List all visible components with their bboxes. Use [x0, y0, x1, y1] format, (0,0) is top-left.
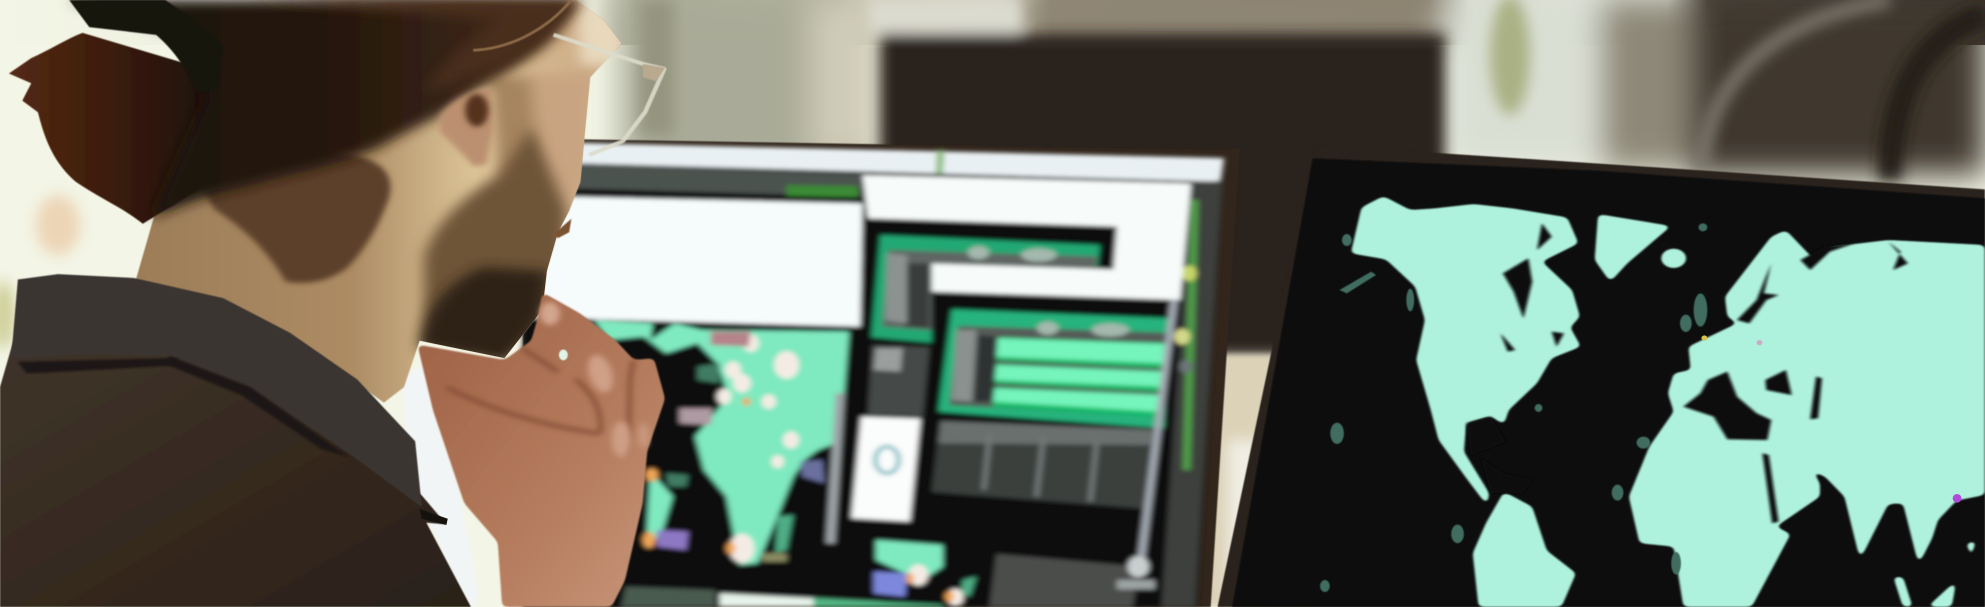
neck and face	[134, 0, 621, 403]
Southeast Asia islands	[1893, 540, 1976, 607]
Iceland	[1661, 248, 1686, 268]
neck hair wisps	[192, 152, 390, 283]
monitor frame	[523, 138, 1240, 607]
bottom white chip	[720, 593, 880, 607]
top bars	[577, 143, 1224, 182]
shirt body	[0, 333, 471, 607]
map on dashboard	[595, 320, 849, 565]
skin and beard shading clipped to face	[420, 0, 625, 364]
table panel 2	[938, 309, 1168, 428]
map markers	[1701, 335, 1707, 341]
monitor bezel	[1218, 145, 1985, 607]
glasses	[554, 35, 664, 155]
ear	[440, 87, 493, 166]
map labels	[711, 332, 751, 347]
panel rail lines	[1140, 300, 1174, 567]
left monitor with dashboard	[496, 138, 1240, 607]
table panel 1	[871, 235, 1100, 343]
world map	[1351, 196, 1985, 607]
lower grey box	[990, 554, 1139, 607]
green rows	[996, 337, 1165, 368]
lower table	[932, 420, 1154, 509]
South America	[1473, 492, 1576, 607]
Greenland	[1595, 214, 1671, 282]
hand	[417, 292, 665, 607]
North America	[1351, 196, 1581, 506]
white device card	[851, 417, 921, 522]
right edge strip	[1162, 181, 1222, 607]
blinds behind face	[640, 0, 674, 135]
faint islands	[1320, 223, 1707, 592]
hair	[69, 0, 580, 219]
scrunchie	[69, 0, 223, 93]
monitor screen	[496, 142, 1224, 607]
right monitor with world map	[1218, 145, 1985, 607]
shirt collar	[11, 274, 422, 507]
Eurasia and Africa	[1629, 230, 1985, 607]
man seen from behind	[0, 0, 665, 607]
bun	[9, 33, 232, 224]
white left side of monitor behind shoulder	[402, 362, 478, 607]
white panels	[496, 195, 862, 327]
inland seas and lakes	[1466, 223, 1908, 523]
dark cabinet and chairs	[870, 0, 1985, 356]
